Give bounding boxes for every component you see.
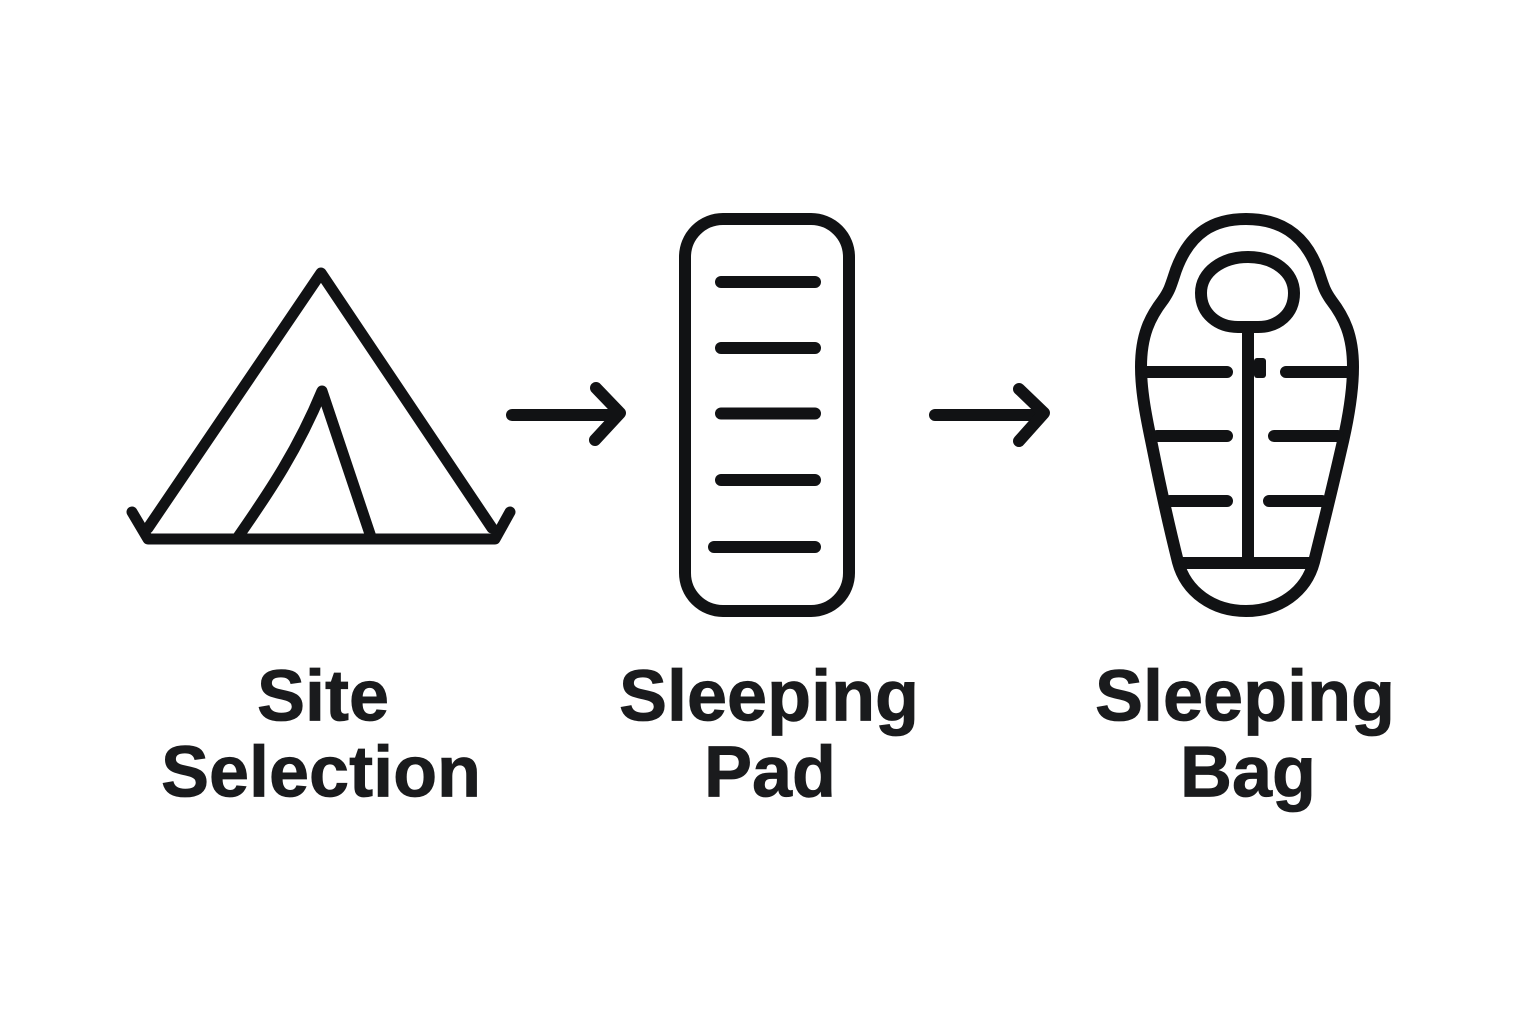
label: Sleeping Pad [619,656,919,812]
label: Sleeping Bag: Bag [1180,732,1316,812]
label: Site Selection [161,656,481,812]
arrow: sleeping pad to sleeping bag [935,389,1044,441]
sleeping bag hood opening [1201,257,1294,327]
icon: tent [132,273,510,539]
sleeping bag baffle lines [1147,372,1347,563]
icon: sleeping pad [685,219,849,611]
label: Sleeping Pad: Pad [704,732,836,812]
icon: sleeping bag [1141,219,1353,611]
arrow: site selection to sleeping pad [512,388,620,440]
label: Site Selection: Site [257,656,389,736]
sleeping bag zipper pull [1254,358,1266,378]
label: Sleeping Bag [1095,656,1395,812]
label: Sleeping Bag: Sleeping [1095,656,1395,736]
label: Site Selection: Selection [161,732,481,812]
label: Sleeping Pad: Sleeping [619,656,919,736]
sleeping bag zipper [1242,327,1254,560]
